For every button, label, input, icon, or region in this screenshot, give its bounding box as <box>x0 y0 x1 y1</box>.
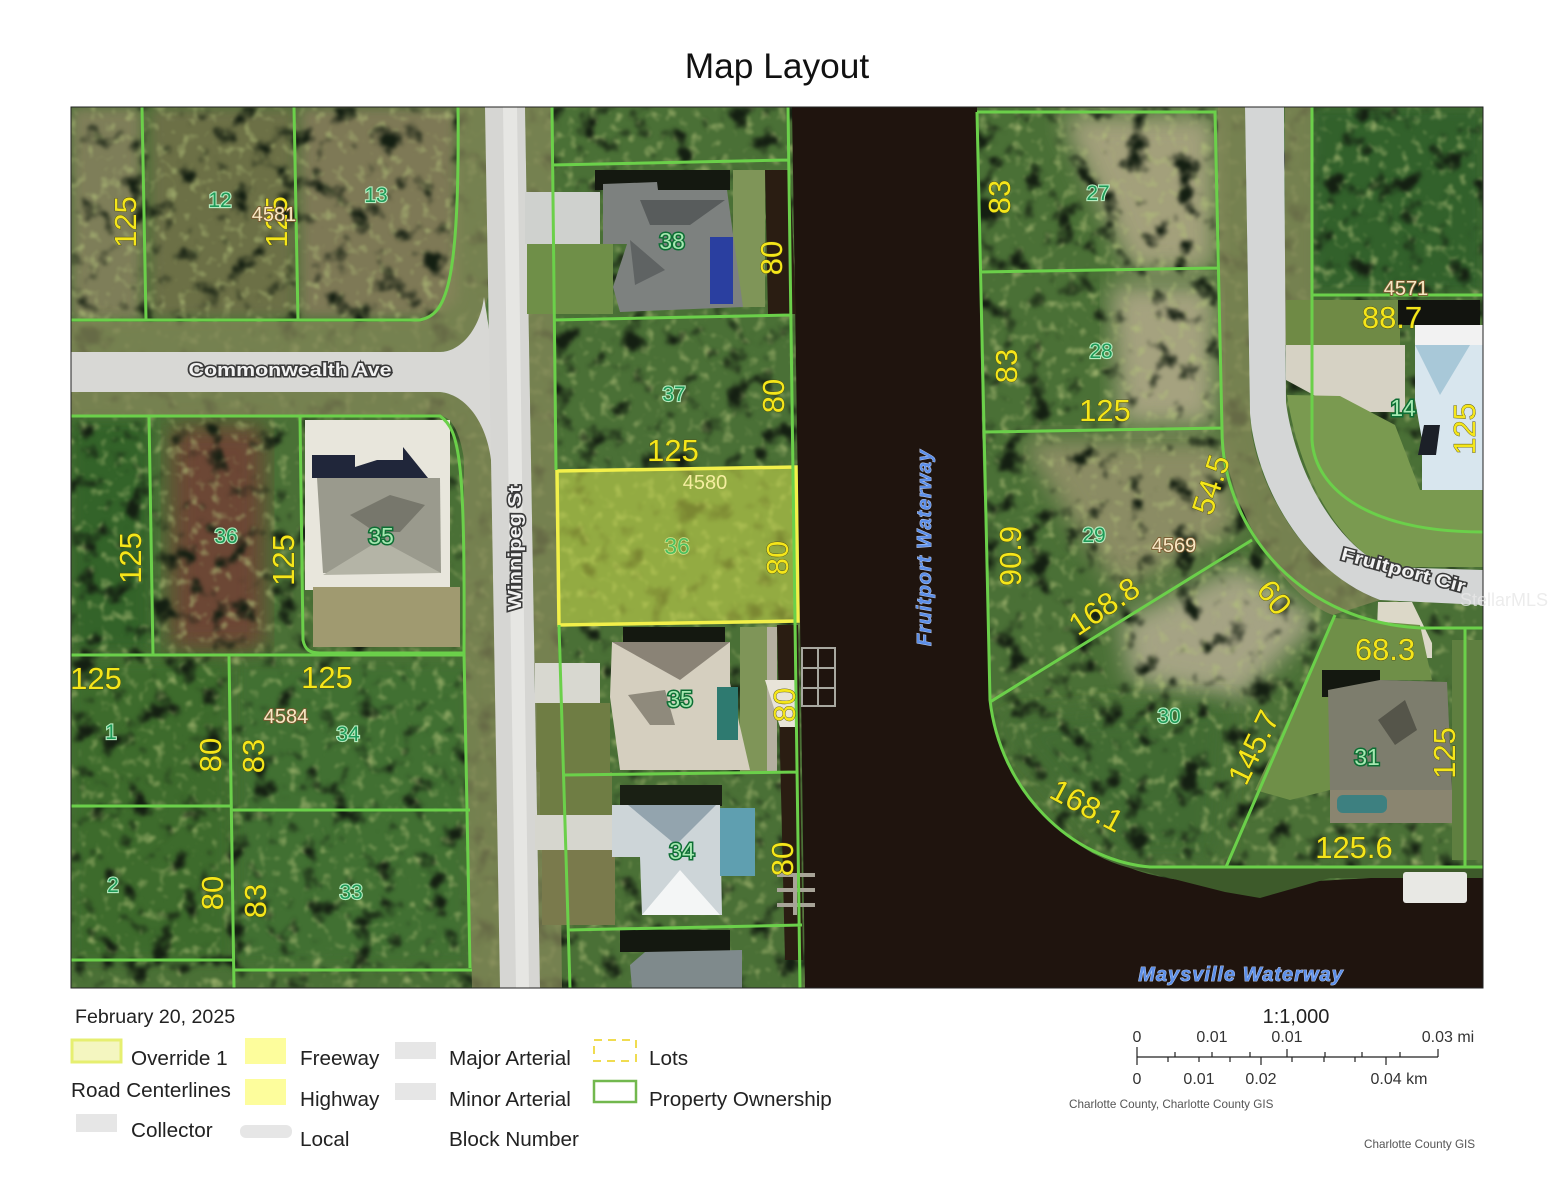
road: Fruitport Cir <box>1245 107 1483 605</box>
legend: freeway: Freeway <box>300 1047 380 1070</box>
parcel dimension labels: 80 <box>760 541 795 575</box>
parcel dimension labels <box>70 180 1482 918</box>
legend: major arterial <box>395 1042 571 1070</box>
house lot 38 <box>603 182 743 312</box>
block number labels: 4581 <box>252 204 296 226</box>
waterway <box>792 107 1483 988</box>
block number labels: 4580 <box>683 472 727 494</box>
shore fringe <box>1130 868 1483 898</box>
attribution right: Charlotte County GIS <box>1364 1138 1475 1151</box>
lot number labels: 2 <box>107 874 119 897</box>
scale bar: 0.01 <box>1196 1029 1228 1046</box>
scale bar: 0.01 <box>1271 1029 1303 1046</box>
parcel dimension labels: 168.8 <box>1062 570 1146 642</box>
lot number labels: 35 <box>667 686 693 712</box>
scale bar: 0.02 <box>1245 1071 1277 1088</box>
legend: local: Local <box>300 1128 349 1151</box>
dock south <box>777 875 815 915</box>
waterway labels: Maysville Waterway <box>1138 964 1344 986</box>
selected parcel 4580 <box>557 467 798 625</box>
parcel dimension labels: 145.7 <box>1221 705 1286 790</box>
parcel dimension labels: 125 <box>108 196 143 248</box>
house lot 35 canal <box>610 642 750 770</box>
parcel dimension labels: 80 <box>767 688 802 722</box>
road labels: Commonwealth Ave <box>188 360 392 380</box>
parcel dimension labels: 125 <box>70 661 122 696</box>
date: February 20, 2025 <box>75 1006 235 1028</box>
parcel dimension labels: 80 <box>754 241 789 275</box>
parcel dimension labels: 90.9 <box>993 526 1028 586</box>
parcel dimension labels: 125 <box>301 660 353 695</box>
waterway labels <box>914 449 1344 986</box>
waterway labels: Fruitport Waterway <box>914 449 936 646</box>
lawns and driveways <box>305 170 1483 952</box>
map border <box>71 107 1483 988</box>
lot number labels: 14 <box>1390 395 1416 421</box>
block number labels: 4571 <box>1384 278 1428 300</box>
house lot 35 west <box>312 447 441 575</box>
legend: major arterial: Major Arterial <box>449 1047 571 1070</box>
parcel dimension labels: 80 <box>765 842 800 876</box>
parcel dimension labels: 83 <box>238 884 273 918</box>
legend: minor arterial: Minor Arterial <box>449 1088 571 1111</box>
attribution: Charlotte County, Charlotte County GIS <box>1069 1098 1274 1111</box>
parcel dimension labels: 83 <box>982 180 1017 214</box>
scale bar: 0.01 <box>1183 1071 1215 1088</box>
parcel dimension labels: 125 <box>1079 393 1131 428</box>
legend: minor arterial <box>395 1083 571 1111</box>
road labels <box>188 360 1468 610</box>
legend: lots: Lots <box>649 1047 688 1070</box>
lot number labels: 12 <box>208 189 232 212</box>
pool lot 35 <box>717 687 738 740</box>
legend: highway: Highway <box>300 1088 380 1111</box>
lot number labels: 30 <box>1157 705 1181 728</box>
legend: local <box>240 1125 349 1151</box>
canal seawall strip <box>765 170 803 960</box>
lot number labels <box>105 182 1416 904</box>
lot number labels: 35 <box>368 523 394 549</box>
legend: block number: Block Number <box>449 1128 579 1151</box>
parcel dimension labels: 80 <box>195 876 230 910</box>
lot number labels: 31 <box>1354 744 1380 770</box>
property lines <box>71 107 1483 988</box>
lot number labels: 34 <box>336 723 360 746</box>
watermark: StellarMLS <box>1460 590 1548 610</box>
block number labels: 4584 <box>264 706 308 728</box>
lot number labels: 28 <box>1089 340 1113 363</box>
pool lot 31 <box>1337 795 1387 813</box>
legend: highway <box>245 1079 380 1111</box>
road: Commonwealth Ave <box>71 297 500 470</box>
lot number labels: 33 <box>339 881 363 904</box>
dock <box>765 680 797 727</box>
grassy road verges <box>71 107 1380 988</box>
legend: property ownership: Property Ownership <box>649 1088 832 1111</box>
lot number labels: 29 <box>1082 524 1106 547</box>
parcel dimension labels: 83 <box>236 739 271 773</box>
block number labels: 4569 <box>1152 535 1196 557</box>
parcel dimension labels: 125 <box>266 534 301 586</box>
parcel dimension labels: 68.3 <box>1355 632 1415 667</box>
map panel <box>70 107 1483 988</box>
house lot 31 <box>1322 670 1452 823</box>
legend: property ownership <box>594 1081 832 1111</box>
parcel dimension labels: 54.5 <box>1185 451 1237 519</box>
lot number labels: 37 <box>662 383 686 406</box>
parcel dimension labels: 80 <box>756 379 791 413</box>
lot number labels: 36 <box>664 533 690 559</box>
parcel dimension labels: 88.7 <box>1362 300 1422 335</box>
parcel dimension labels: 125 <box>647 433 699 468</box>
lot number labels: 38 <box>659 228 685 254</box>
boat shelter <box>1403 872 1467 903</box>
legend: lots <box>594 1040 688 1070</box>
road: Winnipeg St <box>485 107 540 988</box>
scale bar: 0 <box>1133 1029 1142 1046</box>
scale bar <box>1133 1006 1474 1088</box>
pool lot 38 <box>710 237 733 304</box>
lot number labels: 36 <box>214 525 238 548</box>
pool lot 34 <box>720 808 755 876</box>
parcel dimension labels: 60 <box>1250 573 1299 622</box>
road labels: Fruitport Cir <box>1339 544 1468 596</box>
house lot 34 <box>612 805 755 915</box>
parcel dimension labels: 125.6 <box>1315 830 1393 865</box>
lot number labels: 27 <box>1086 182 1110 205</box>
block number labels <box>252 204 1428 728</box>
boat lift <box>802 648 835 706</box>
parcel dimension labels: 83 <box>989 349 1024 383</box>
house east lot 14 <box>1415 325 1483 490</box>
scale ratio: 1:1,000 <box>1263 1006 1329 1028</box>
scale bar: 0 <box>1133 1071 1142 1088</box>
parcel dimension labels: 125 <box>1447 403 1482 455</box>
legend: override 1: Override 1 <box>131 1047 228 1070</box>
lot number labels: 34 <box>669 838 695 864</box>
title: Map Layout <box>685 47 869 86</box>
lot number labels: 1 <box>105 721 117 744</box>
scale bar: 0.04 km <box>1371 1071 1427 1088</box>
scale bar: 0.03 mi <box>1422 1029 1474 1046</box>
legend <box>71 1006 832 1151</box>
parcel dimension labels: 125 <box>1427 727 1462 779</box>
legend: road centerlines: Road Centerlines <box>71 1079 231 1102</box>
legend: collector: Collector <box>131 1119 213 1142</box>
driveway stub south of Fruitport Cir <box>1377 602 1432 658</box>
road labels: Winnipeg St <box>505 485 525 610</box>
parcel dimension labels: 125 <box>113 532 148 584</box>
legend: freeway <box>245 1038 380 1070</box>
parcel dimension labels: 168.1 <box>1044 772 1129 839</box>
aerial vegetation base <box>71 107 1483 988</box>
legend: override 1 <box>72 1040 228 1070</box>
lot number labels: 13 <box>364 184 388 207</box>
house south <box>630 950 742 988</box>
parcel dimension labels: 80 <box>193 738 228 772</box>
parcel dimension labels: 125 <box>259 196 294 248</box>
legend: collector <box>76 1114 213 1142</box>
